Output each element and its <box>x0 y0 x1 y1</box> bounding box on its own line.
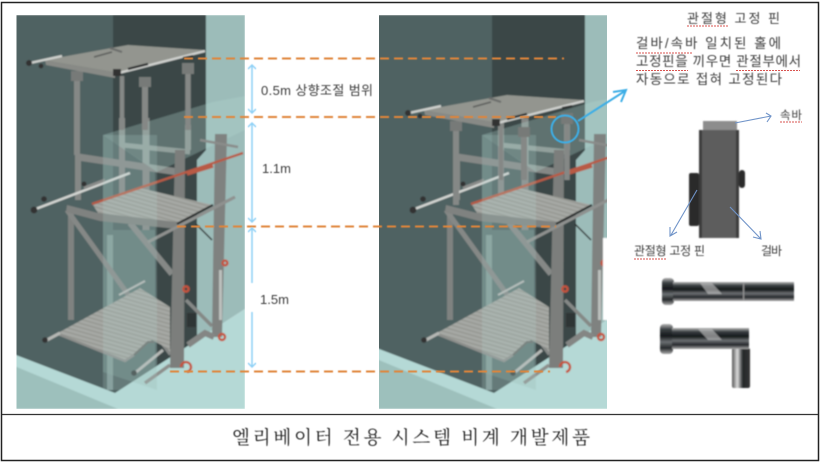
label: outer bar: 걸바 <box>761 244 782 258</box>
description text: 고정핀을 끼우면 관절부에서 <box>636 54 801 69</box>
scaffold scene: shaft walls and lower frame <box>0 15 245 409</box>
icon: joint section of inner and outer bar <box>689 121 745 238</box>
photo: folded pin <box>660 324 750 388</box>
dimension label: 0.5m: 0.5m 상향조절 범위 <box>261 83 373 98</box>
description text: 자동으로 접혀 고정된다 <box>636 72 783 87</box>
callout circle and arrow <box>552 90 626 142</box>
caption row divider <box>2 414 818 416</box>
photo: straight pin <box>662 278 794 305</box>
height dimension arrows <box>248 65 256 367</box>
lowered top platform <box>405 95 584 205</box>
dimension label: 1.1m: 1.1m <box>262 161 291 176</box>
panel: left scaffold render at raised position <box>0 15 245 409</box>
part arrows <box>670 113 771 239</box>
heading: joint fixing pin: 관절형 고정 핀 <box>687 11 780 26</box>
description text: 걸바/속바 일치된 홀에 <box>636 36 781 51</box>
panel: right scaffold render at lowered position <box>374 15 624 409</box>
caption: 엘리베이터 전용 시스템 비계 개발제품 <box>232 427 590 449</box>
label: inner bar: 속바 <box>780 109 802 122</box>
raised top platform <box>26 45 205 155</box>
dimension label: 1.5m: 1.5m <box>260 292 289 307</box>
description text <box>636 36 801 87</box>
orange dashed level lines <box>170 58 564 372</box>
spellcheck underlines <box>634 26 802 259</box>
label: joint fixing pin: 관절형 고정 핀 <box>634 244 705 258</box>
white notch at right edge of render <box>603 238 609 320</box>
scaffold scene: shaft walls and lower frame <box>374 15 624 409</box>
